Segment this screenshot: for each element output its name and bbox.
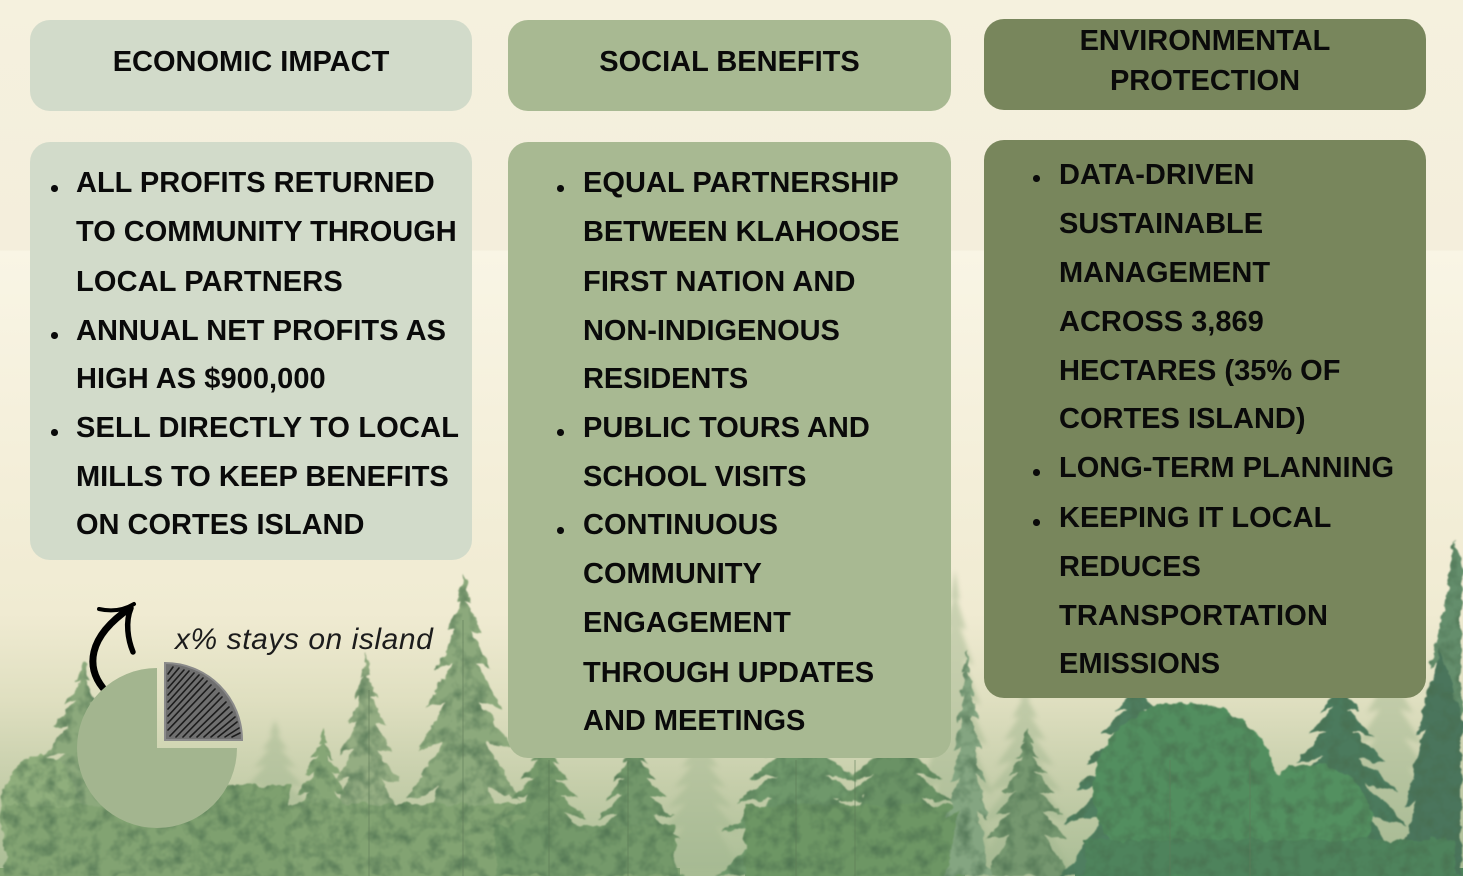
heading text: SOCIAL BENEFITS	[599, 46, 860, 78]
bullet: equal partnership: RESIDENTS	[583, 363, 748, 395]
bullet: annual net profits	[51, 315, 446, 395]
bullet: all profits returned: TO COMMUNITY THROUGH	[76, 216, 457, 248]
bullet: public tours: PUBLIC TOURS AND	[583, 412, 870, 444]
panel: economic impact bullets	[30, 142, 472, 560]
bullet: all profits returned: LOCAL PARTNERS	[76, 266, 343, 298]
caption: x% stays on island: x% stays on island	[175, 623, 433, 656]
panel: social benefits bullets	[508, 142, 951, 758]
bullet: equal partnership: EQUAL PARTNERSHIP	[583, 167, 899, 199]
panel: environmental protection heading	[984, 19, 1426, 110]
pie chart: share staying on island	[77, 602, 243, 828]
bullet: data-driven management: CORTES ISLAND)	[1059, 403, 1306, 435]
bullet: keeping it local	[1033, 502, 1331, 680]
bullet: community engagement: COMMUNITY	[583, 558, 762, 590]
bullet: sell directly: SELL DIRECTLY TO LOCAL	[76, 412, 459, 444]
bullet: data-driven management: ACROSS 3,869	[1059, 306, 1264, 338]
bullet: community engagement: THROUGH UPDATES	[583, 657, 874, 689]
bullet: community engagement: AND MEETINGS	[583, 705, 805, 737]
bullet: equal partnership: NON-INDIGENOUS	[583, 315, 840, 347]
bullet: data-driven management: SUSTAINABLE	[1059, 208, 1263, 240]
bullet: annual net profits: ANNUAL NET PROFITS AS	[76, 315, 446, 347]
bullet: all profits returned	[51, 167, 457, 298]
bullet: annual net profits: HIGH AS $900,000	[76, 363, 326, 395]
panel: social benefits heading	[508, 20, 951, 111]
bullet: public tours	[557, 412, 870, 493]
bullet: keeping it local: EMISSIONS	[1059, 648, 1220, 680]
bullet: data-driven management: HECTARES (35% OF	[1059, 355, 1340, 387]
bullet: equal partnership	[557, 167, 899, 395]
bullet: sell directly: MILLS TO KEEP BENEFITS	[76, 461, 449, 493]
heading text: ENVIRONMENTAL	[1080, 25, 1330, 57]
bullet: equal partnership: BETWEEN KLAHOOSE	[583, 216, 899, 248]
pie: hatched slice	[165, 663, 242, 740]
bullet: data-driven management: DATA-DRIVEN	[1059, 159, 1254, 191]
bullet: keeping it local: TRANSPORTATION	[1059, 600, 1328, 632]
bullet: community engagement: ENGAGEMENT	[583, 607, 791, 639]
bullet: all profits returned: ALL PROFITS RETURNED	[76, 167, 435, 199]
heading text	[1080, 25, 1330, 97]
bullet: data-driven management: MANAGEMENT	[1059, 257, 1270, 289]
bullet: community engagement	[557, 509, 874, 737]
bullet: sell directly: ON CORTES ISLAND	[76, 509, 364, 541]
heading text: ECONOMIC IMPACT	[113, 46, 389, 78]
bullet: data-driven management	[1033, 159, 1340, 435]
bullet: keeping it local: KEEPING IT LOCAL	[1059, 502, 1331, 534]
bullet: public tours: SCHOOL VISITS	[583, 461, 806, 493]
panel: economic impact heading	[30, 20, 472, 111]
bullet: sell directly	[51, 412, 459, 541]
bullet: community engagement: CONTINUOUS	[583, 509, 778, 541]
bullet: long-term planning: LONG-TERM PLANNING	[1059, 452, 1394, 484]
heading text: PROTECTION	[1110, 65, 1300, 97]
panel: environmental protection bullets	[984, 140, 1426, 698]
bullet: keeping it local: REDUCES	[1059, 551, 1201, 583]
arrow: curved up	[93, 604, 134, 688]
pie: remaining share	[77, 668, 237, 828]
bullet: equal partnership: FIRST NATION AND	[583, 266, 856, 298]
